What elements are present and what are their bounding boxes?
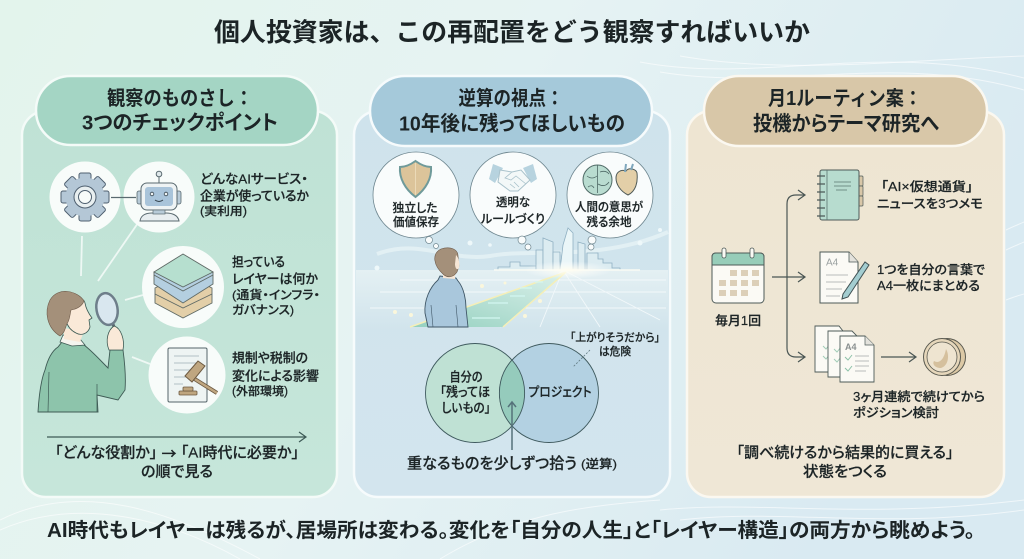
icon: calendar [712,248,764,303]
panel: backcasting perspective [354,76,670,497]
text: pick overlaps: 重なるものを少しずつ拾う [407,454,577,472]
venn diagram: 自分の [450,370,482,384]
text: summarize on A4: A4一枚にまとめる [877,279,980,293]
text: layer role: レイヤーは何か [232,272,318,286]
text: after three months: 3ヶ月連続で続けてから [853,389,985,404]
bubble: independent store of value: 価値保存 [393,214,439,229]
callout: danger note: は危険 [599,344,631,358]
text: summarize on A4 [877,262,985,293]
text: services and companies [200,172,309,218]
heading: observation checkpoints: 3つのチェックポイント [82,112,278,134]
text: summarize on A4: 1つを自分の言葉で [877,262,985,277]
bubble: independent store of value: 独立した [392,200,438,215]
icon: layers [142,246,224,328]
venn diagram: 「残ってほ [440,384,490,400]
text: layer role: 担っている [232,254,285,270]
bubble: room for human will: 人間の意思が [575,199,643,214]
panel: observation checkpoints [22,76,337,497]
panel: monthly routine [687,76,1004,497]
text: memo news: ニュースを3つメモ [877,197,983,211]
icon: coin [924,338,966,376]
heading: observation checkpoints: 観察のものさし： [107,87,253,110]
text: layer role: (通貨・インフラ・ [232,287,320,302]
venn diagram: しいもの」 [442,400,490,416]
connector lines [81,223,150,364]
label: once a month: 毎月1回 [715,313,761,328]
bubble: transparent rule making: ルールづくり [480,212,545,226]
footer message: AI時代もレイヤーは残るが、居場所は変わる。変化を「自分の人生」と「レイヤー構造」の両方から眺めよう。 [47,518,975,542]
arrow: to coin [881,352,916,362]
bubble: independent store of value [373,152,459,248]
text: layer role [232,254,320,317]
bubble: transparent rule making [470,152,556,250]
title: 個人投資家は、この再配置をどう観察すればいいか [214,19,810,47]
icon: gear [50,162,120,232]
icon: stacked checklists [815,326,874,382]
text: memo news: 「AI×仮想通貨」 [881,179,973,194]
heading: monthly routine: 投機からテーマ研究へ [753,112,939,136]
bubble: room for human will [567,152,653,250]
icon: A4 sheet and pen [820,252,869,303]
text: services and companies: 企業が使っているか [200,188,309,204]
icon: document and gavel [148,336,226,414]
heading: observation checkpoints [36,76,318,145]
heading: monthly routine: 月1ルーティン案： [768,87,922,110]
icon: A4 sheet and pen: A4 [826,258,839,268]
text: order of viewing [55,442,299,480]
venn diagram [426,344,598,442]
text: order of viewing: 「どんな役割か」 → 「AI時代に必要か」 [55,442,299,464]
scene: future city and road [356,228,668,330]
arrow: overlap pointer [508,402,516,450]
callout: danger note [570,330,660,367]
bubble: room for human will: 残る余地 [586,214,632,229]
arrow: order of viewing [47,432,306,442]
arrows: branching flow [772,190,805,362]
text: order of viewing: の順で見る [141,464,213,480]
icon: robot [111,162,194,232]
icon: notebook [817,170,863,220]
heading: monthly routine [704,76,987,146]
heading: backcasting perspective: 10年後に残ってほしいもの [399,112,625,136]
icon: stacked checklists: A4 [845,342,857,352]
text: regulation impact [232,350,319,398]
text: layer role: ガバナンス) [232,303,294,317]
heading: backcasting perspective: 逆算の視点： [458,87,564,110]
venn diagram: プロジェクト [528,384,592,400]
illustration: man with magnifying glass [38,291,125,412]
text: regulation impact: 規制や税制の [232,350,308,366]
text: after three months: ポジション検討 [853,405,940,420]
text: regulation impact: 変化による影響 [232,368,319,384]
text: keep researching: 状態をつくる [803,462,887,480]
text: keep researching [736,444,954,480]
text: memo news [877,179,983,211]
illustration: man seen from behind [425,248,468,327]
heading: backcasting perspective [370,76,652,146]
callout: danger note: 「上がりそうだから」 [570,330,660,344]
text: services and companies: (実利用) [200,204,247,218]
bubble: transparent rule making: 透明な [496,195,530,209]
text: keep researching: 「調べ続けるから結果的に買える」 [736,444,954,462]
text: pick overlaps: (逆算) [581,456,617,471]
text: after three months [853,389,985,420]
text: regulation impact: (外部環境) [232,384,288,398]
text: services and companies: どんなAIサービス・ [200,172,308,186]
